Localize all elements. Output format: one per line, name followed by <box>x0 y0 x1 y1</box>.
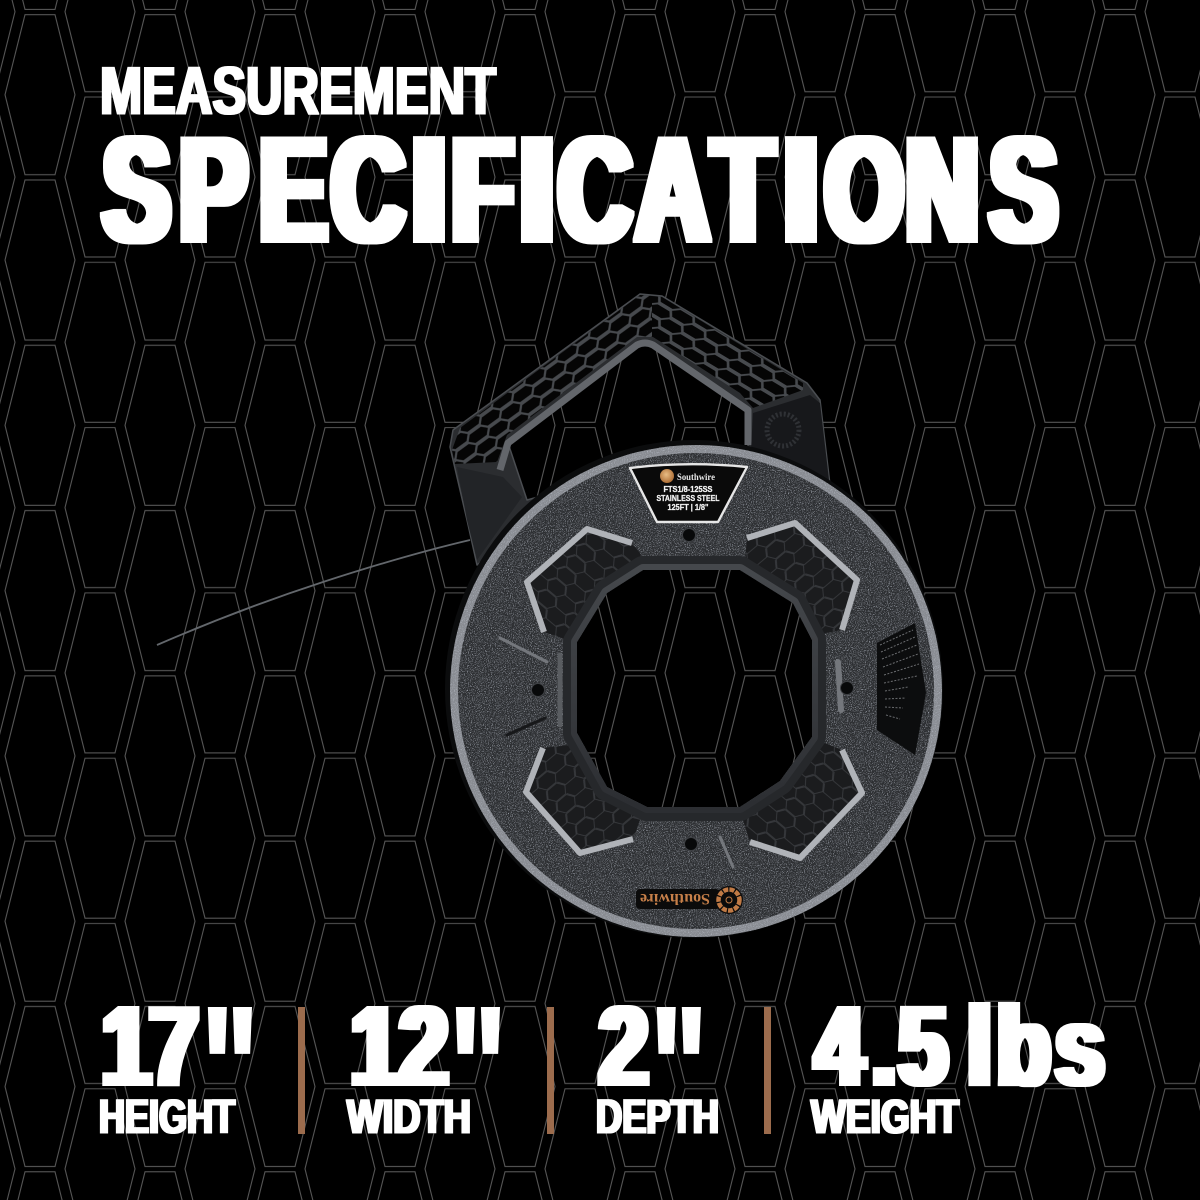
divider <box>547 1007 554 1134</box>
value <box>815 984 1104 1110</box>
reel handle <box>445 290 830 565</box>
handle left foot <box>457 467 522 560</box>
label: DEPTH <box>596 1091 719 1144</box>
top grip panel left <box>527 529 645 640</box>
printed information plate on right <box>877 623 926 755</box>
value <box>102 973 258 1164</box>
value: " <box>650 973 707 1164</box>
value: l <box>967 984 992 1110</box>
divider <box>298 1007 305 1134</box>
value: 2 <box>399 984 448 1110</box>
value: 7 <box>149 984 198 1110</box>
label: WEIGHT <box>811 1091 959 1144</box>
spec: height <box>99 973 258 1164</box>
heading: SPECIFICATIONS: O <box>825 107 904 273</box>
label logo <box>660 469 674 483</box>
handle inner highlight <box>500 343 748 470</box>
heading: MEASUREMENT: MEASUREMENT <box>100 53 496 129</box>
label: HEIGHT <box>99 1091 235 1144</box>
spec: weight <box>811 984 1104 1144</box>
inner rim around opening <box>577 570 812 807</box>
fish tape wire <box>157 540 470 645</box>
heading: SPECIFICATIONS: I <box>416 116 442 265</box>
value: . <box>872 984 896 1110</box>
label model: FTS1/8-125SS <box>664 484 713 494</box>
heading: SPECIFICATIONS: F <box>452 107 513 273</box>
value: 4 <box>815 984 864 1110</box>
southwire brand badge <box>636 886 743 914</box>
spec: depth <box>596 973 719 1164</box>
heading: SPECIFICATIONS: I <box>524 116 550 265</box>
top grip panel right <box>745 523 857 635</box>
value: 1 <box>102 984 151 1110</box>
label brand: Southwire <box>677 472 715 482</box>
label material: STAINLESS STEEL <box>656 493 720 503</box>
product label plate <box>630 464 747 522</box>
heading: SPECIFICATIONS: S <box>990 107 1057 273</box>
heading: SPECIFICATIONS: S <box>103 107 170 273</box>
product: fish tape reel <box>157 290 943 938</box>
heading: SPECIFICATIONS: I <box>788 116 814 265</box>
heading: SPECIFICATIONS: T <box>712 107 774 273</box>
value: " <box>449 973 506 1164</box>
moulded highlights <box>500 638 841 867</box>
value <box>351 973 506 1164</box>
value: s <box>1055 984 1104 1110</box>
outer light ring <box>450 445 942 937</box>
handle right foot with embossed logo <box>750 395 829 480</box>
value: b <box>997 984 1051 1110</box>
heading: SPECIFICATIONS: C <box>558 107 631 273</box>
divider <box>764 1007 771 1134</box>
heading: SPECIFICATIONS: A <box>636 107 709 273</box>
outer dark edge <box>445 440 943 938</box>
heading: SPECIFICATIONS: N <box>906 107 979 273</box>
southwire brand badge: Southwire <box>640 890 710 907</box>
handle honeycomb mesh <box>445 290 810 470</box>
screws <box>532 528 854 850</box>
heading: SPECIFICATIONS: C <box>331 107 404 273</box>
label: WIDTH <box>347 1091 471 1144</box>
bottom grip panel right <box>742 740 862 858</box>
value <box>599 973 707 1164</box>
heading: SPECIFICATIONS <box>103 107 1057 273</box>
heading: SPECIFICATIONS: P <box>180 107 247 273</box>
value: 1 <box>351 984 400 1110</box>
value: 5 <box>899 984 972 1110</box>
spec: width <box>347 973 506 1164</box>
textured face <box>458 453 934 929</box>
reel body <box>445 440 943 938</box>
heading: SPECIFICATIONS: E <box>260 107 327 273</box>
value: " <box>201 973 258 1164</box>
bottom grip panel left <box>526 745 642 853</box>
label size: 125FT | 1/8" <box>668 502 708 512</box>
value: 2 <box>599 984 648 1110</box>
